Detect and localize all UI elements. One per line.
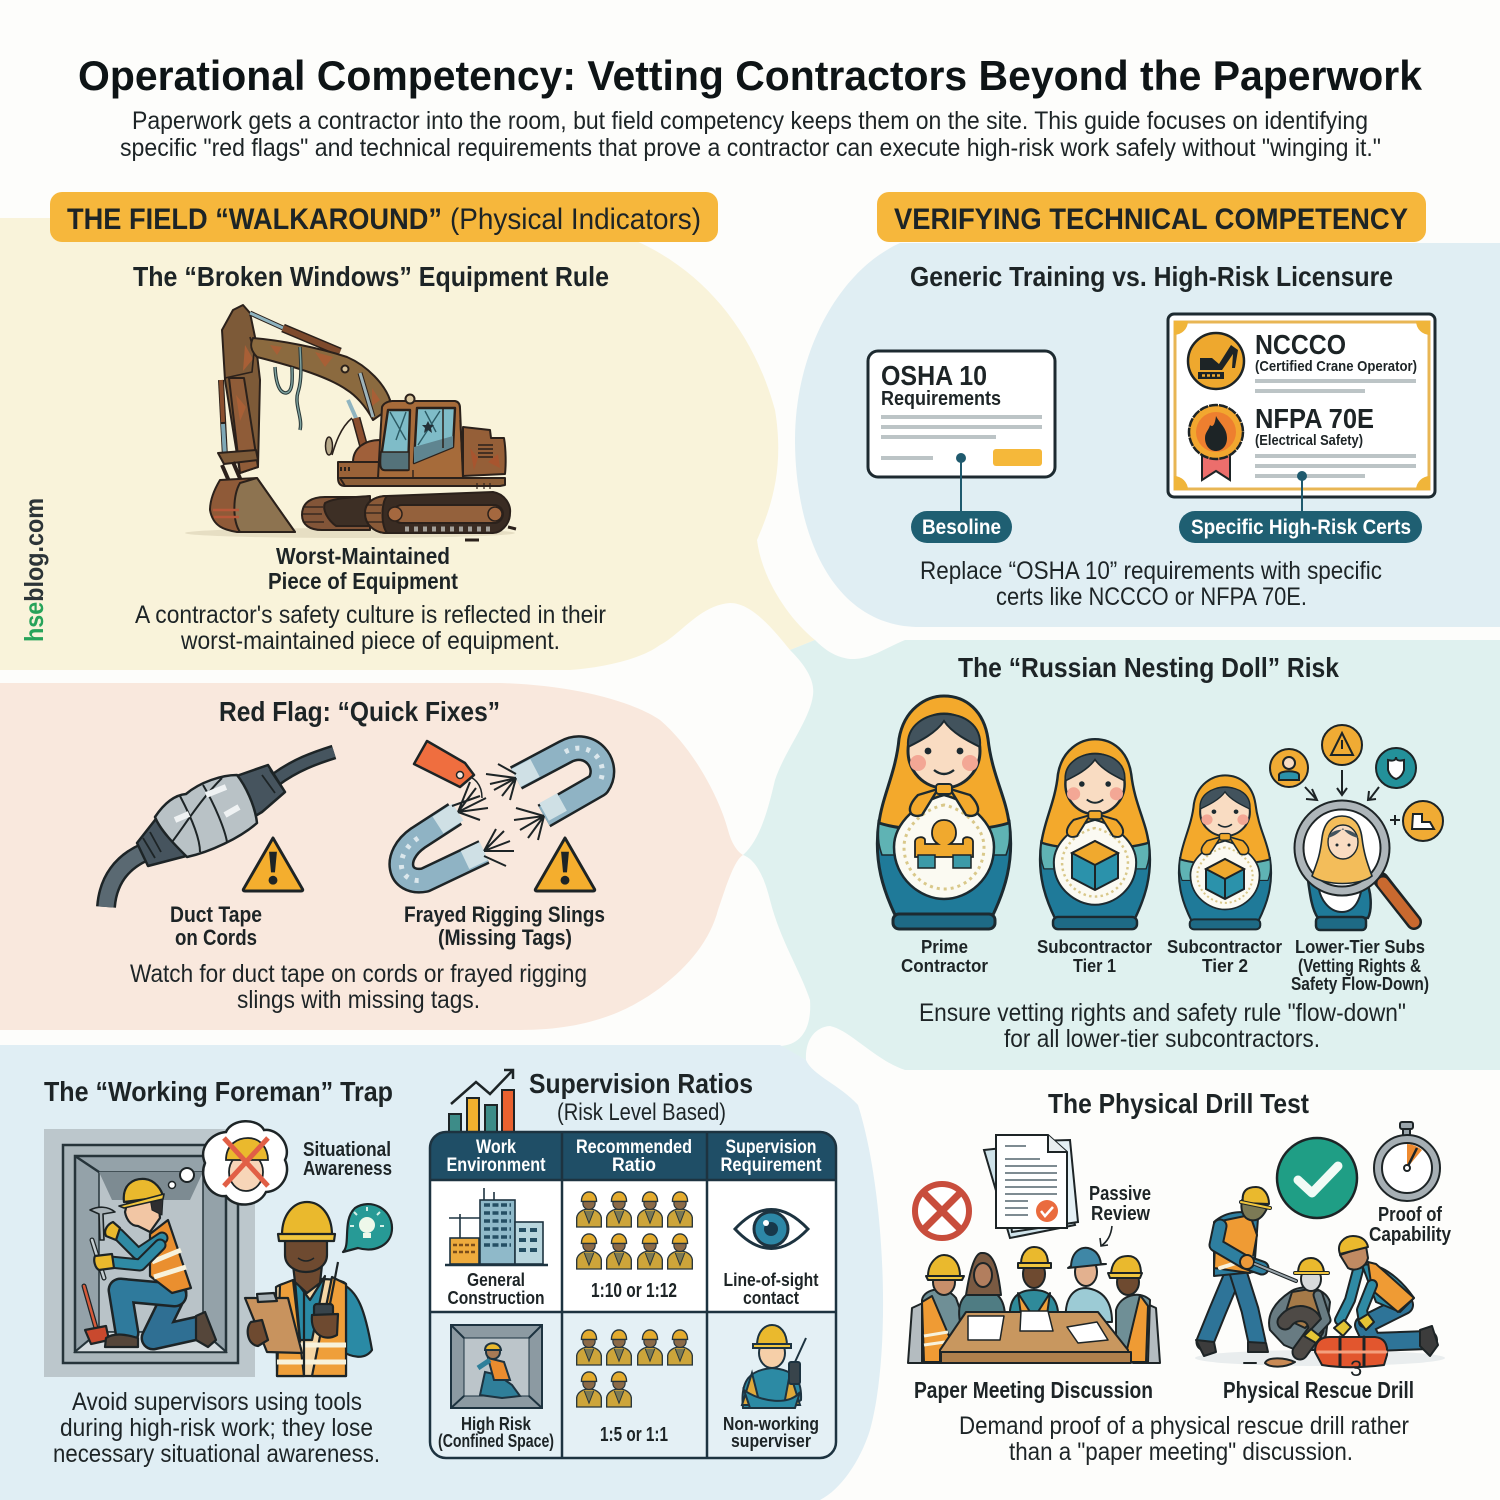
heading badge: field walkaround: THE FIELD “WALKAROUND” [67,203,442,236]
table: supervision ratios [430,1132,836,1458]
intro text [120,107,1381,162]
caption: tier 2 [1167,937,1282,976]
doll: prime contractor [877,696,1011,976]
caption: non-working supervisor [723,1414,819,1451]
icon group: workers 1:5 [577,1330,692,1407]
heading badge: technical competency: VERIFYING TECHNICAL COMPETENCY [894,203,1408,236]
caption: duct tape: Duct Tape [170,902,262,927]
heading: quick fixes: Red Flag: “Quick Fixes” [219,696,500,727]
table header: Ratio [612,1155,656,1176]
value: 1:5 or 1:1: 1:5 or 1:1 [600,1424,668,1446]
caption: line of sight: contact [743,1288,799,1308]
caption: tier 2: Tier 2 [1202,956,1248,976]
text: quick fixes body [130,960,587,1014]
callout: situational awareness thought bubble: Awareness [303,1158,392,1180]
text: nesting doll body [919,999,1406,1053]
caption: worst-maintained: Piece of Equipment [268,568,458,594]
icon: warning triangle two [535,838,595,891]
text: physical drill body: Demand proof of a physical rescue drill rather [959,1412,1409,1440]
icon: fire seal [1189,405,1243,480]
caption: frayed slings [404,902,605,950]
caption: paper meeting: Paper Meeting Discussion [914,1377,1153,1403]
illustration: magnified lower-tier doll [1299,805,1414,930]
panel: peach quick fixes background [0,683,743,1030]
caption: lower-tier subs: (Vetting Rights & [1298,956,1421,976]
section: generic training vs licensure [868,261,1435,611]
caption: frayed slings: Frayed Rigging Slings [404,902,605,927]
icon: green check [1277,1138,1357,1218]
icon group: workers 1:10 [577,1192,692,1269]
text: quick fixes body: slings with missing tags. [237,986,480,1014]
intro text: specific "red flags" and technical requirements that prove a contractor can execute high-risk work safely without "winging it." [120,134,1381,162]
caption: prime contractor: Contractor [901,956,988,976]
text: foreman body: necessary situational awareness. [53,1440,380,1468]
callout: situational awareness thought bubble [168,1121,392,1205]
icon: confined space worker [451,1325,542,1408]
text: nesting doll body: Ensure vetting rights and safety rule "flow-down" [919,999,1406,1027]
text: physical drill body [959,1412,1409,1466]
label: passive review: Passive [1089,1183,1151,1205]
panel: teal nesting doll background [743,640,1500,1070]
illustration: physical rescue drill [1195,1187,1445,1367]
panel: blue technical competency background [795,243,1500,627]
watermark: hseblog.com: hseblog.com [19,498,49,642]
heading: supervision ratios: Supervision Ratios [529,1068,753,1099]
caption: frayed slings: (Missing Tags) [438,925,572,950]
caption: prime contractor: Prime [921,937,968,957]
heading: working foreman: The “Working Foreman” Trap [44,1076,393,1107]
caption: worst-maintained: Worst-Maintained [276,543,450,569]
section: broken windows [133,261,609,655]
text: broken windows body: A contractor's safety culture is reflected in their [135,601,606,629]
icon: paper document stack [984,1135,1078,1238]
illustration: duct taped cord [106,752,334,907]
icon: non-working supervisor [742,1325,806,1408]
section: quick fixes [106,696,605,1014]
panel: yellow walkaround background [0,218,815,670]
caption: worst-maintained [268,543,458,594]
heading: physical drill: The Physical Drill Test [1048,1088,1309,1119]
illustration: kneeling foreman with tools [84,1179,216,1347]
panel: blue working foreman background [0,1045,883,1500]
icons: vetting rights around magnifier [1270,725,1443,841]
icon: stopwatch [1374,1122,1440,1201]
caption: tier 1 [1037,937,1152,976]
caption: line of sight: Line-of-sight [724,1270,818,1290]
label: proof of capability: Capability [1369,1224,1452,1246]
caption: duct tape [170,902,262,950]
table header [446,1137,822,1176]
caption: duct tape: on Cords [175,925,257,950]
heading: nesting doll: The “Russian Nesting Doll” Risk [958,652,1339,683]
caption: non-working supervisor: Non-working [723,1414,819,1434]
heading: supervision ratios: (Risk Level Based) [557,1099,726,1126]
illustration: supervisor with clipboard [245,1202,392,1376]
text: foreman body: Avoid supervisors using tools [72,1388,362,1416]
caption: lower-tier subs: Lower-Tier Subs [1295,937,1425,957]
table header: Work [476,1137,516,1158]
card: high risk certificate: (Certified Crane Operator) [1255,358,1417,375]
icon: crane badge [1188,333,1244,389]
caption: general construction [448,1270,544,1308]
card: high risk certificate [1168,314,1435,512]
heading badge: field walkaround [50,192,718,242]
label: passive review [1089,1183,1151,1246]
caption: tier 2: Subcontractor [1167,937,1282,957]
card: high risk certificate: NCCCO [1255,329,1346,360]
caption: tier 1: Subcontractor [1037,937,1152,957]
card: high risk certificate: (Electrical Safety) [1255,432,1363,449]
label: proof of capability [1369,1204,1452,1246]
card: OSHA 10: Requirements [881,388,1001,410]
text: licensure body: certs like NCCCO or NFPA 70E. [996,583,1307,611]
card: OSHA 10 [868,351,1055,512]
caption: high risk: (Confined Space) [438,1431,554,1451]
heading: supervision ratios [529,1068,753,1126]
section: working foreman [44,1076,393,1468]
text: licensure body: Replace “OSHA 10” requirements with specific [920,557,1382,585]
icon: eye [735,1210,808,1248]
text: quick fixes body: Watch for duct tape on cords or frayed rigging [130,960,587,988]
heading: generic training: Generic Training vs. High-Risk Licensure [910,261,1393,292]
section: physical drill test [908,1088,1452,1466]
caption: non-working supervisor: superviser [731,1431,811,1451]
caption: lower-tier subs: Safety Flow-Down) [1291,974,1429,994]
table header: Environment [446,1155,546,1176]
icon: warning triangle one [243,838,303,891]
text: nesting doll body: for all lower-tier subcontractors. [1004,1025,1320,1053]
heading badge: field walkaround: (Physical Indicators) [450,203,701,236]
icon: city buildings and crane [445,1188,548,1265]
text: broken windows body [135,601,606,655]
heading badge: technical competency [877,192,1426,242]
icon: light bulb [350,1207,384,1238]
caption: line of sight [724,1270,818,1308]
caption: physical rescue drill: Physical Rescue Drill [1223,1377,1414,1403]
text: foreman body [53,1388,380,1468]
intro text: Paperwork gets a contractor into the room, but field competency keeps them on the site. This guide focuses on identifying [132,107,1368,135]
text: licensure body [920,557,1382,611]
title: Operational Competency: Vetting Contractors Beyond the Paperwork [78,52,1423,99]
card: OSHA 10: OSHA 10 [881,360,987,391]
caption: high risk [438,1414,554,1451]
section: supervision ratios [430,1068,836,1458]
pill: baseline [911,511,1012,543]
caption: general construction: General [467,1270,525,1290]
label: proof of capability: Proof of [1378,1204,1442,1226]
illustration: confined space frame [44,1129,255,1377]
caption: general construction: Construction [448,1288,544,1308]
pill: specific high-risk certs: Specific High-Risk Certs [1191,516,1411,539]
label: passive review: Review [1091,1203,1150,1225]
callout: situational awareness thought bubble: Situational [303,1139,391,1161]
doll: subcontractor tier 2 [1167,775,1282,976]
icon: red prohibited [915,1184,969,1238]
caption: lower-tier subs [1291,937,1429,994]
text: foreman body: during high-risk work; they lose [60,1414,373,1442]
stray page number: 3 [1350,1356,1362,1381]
pill: baseline: Besoline [922,516,1001,539]
doll: subcontractor tier 1 [1037,739,1152,976]
table header: Requirement [720,1155,822,1176]
card: high risk certificate: NFPA 70E [1255,403,1374,434]
caption: prime contractor [901,937,988,976]
illustration: rusty excavator [185,305,516,540]
icon: rising bar chart [449,1070,514,1132]
caption: tier 1: Tier 1 [1073,956,1116,976]
caption: high risk: High Risk [461,1414,532,1434]
text: physical drill body: than a "paper meeting" discussion. [1009,1438,1353,1466]
section: russian nesting doll [877,652,1443,1053]
table header: Supervision [726,1137,816,1158]
illustration: paper meeting [908,1247,1160,1363]
table header: Recommended [576,1137,692,1158]
pill: specific high-risk certs [1179,511,1422,543]
heading: broken windows: The “Broken Windows” Equipment Rule [133,261,609,292]
text: broken windows body: worst-maintained piece of equipment. [180,627,560,655]
value: 1:10 or 1:12: 1:10 or 1:12 [591,1280,677,1302]
illustration: frayed rigging sling [401,741,602,881]
